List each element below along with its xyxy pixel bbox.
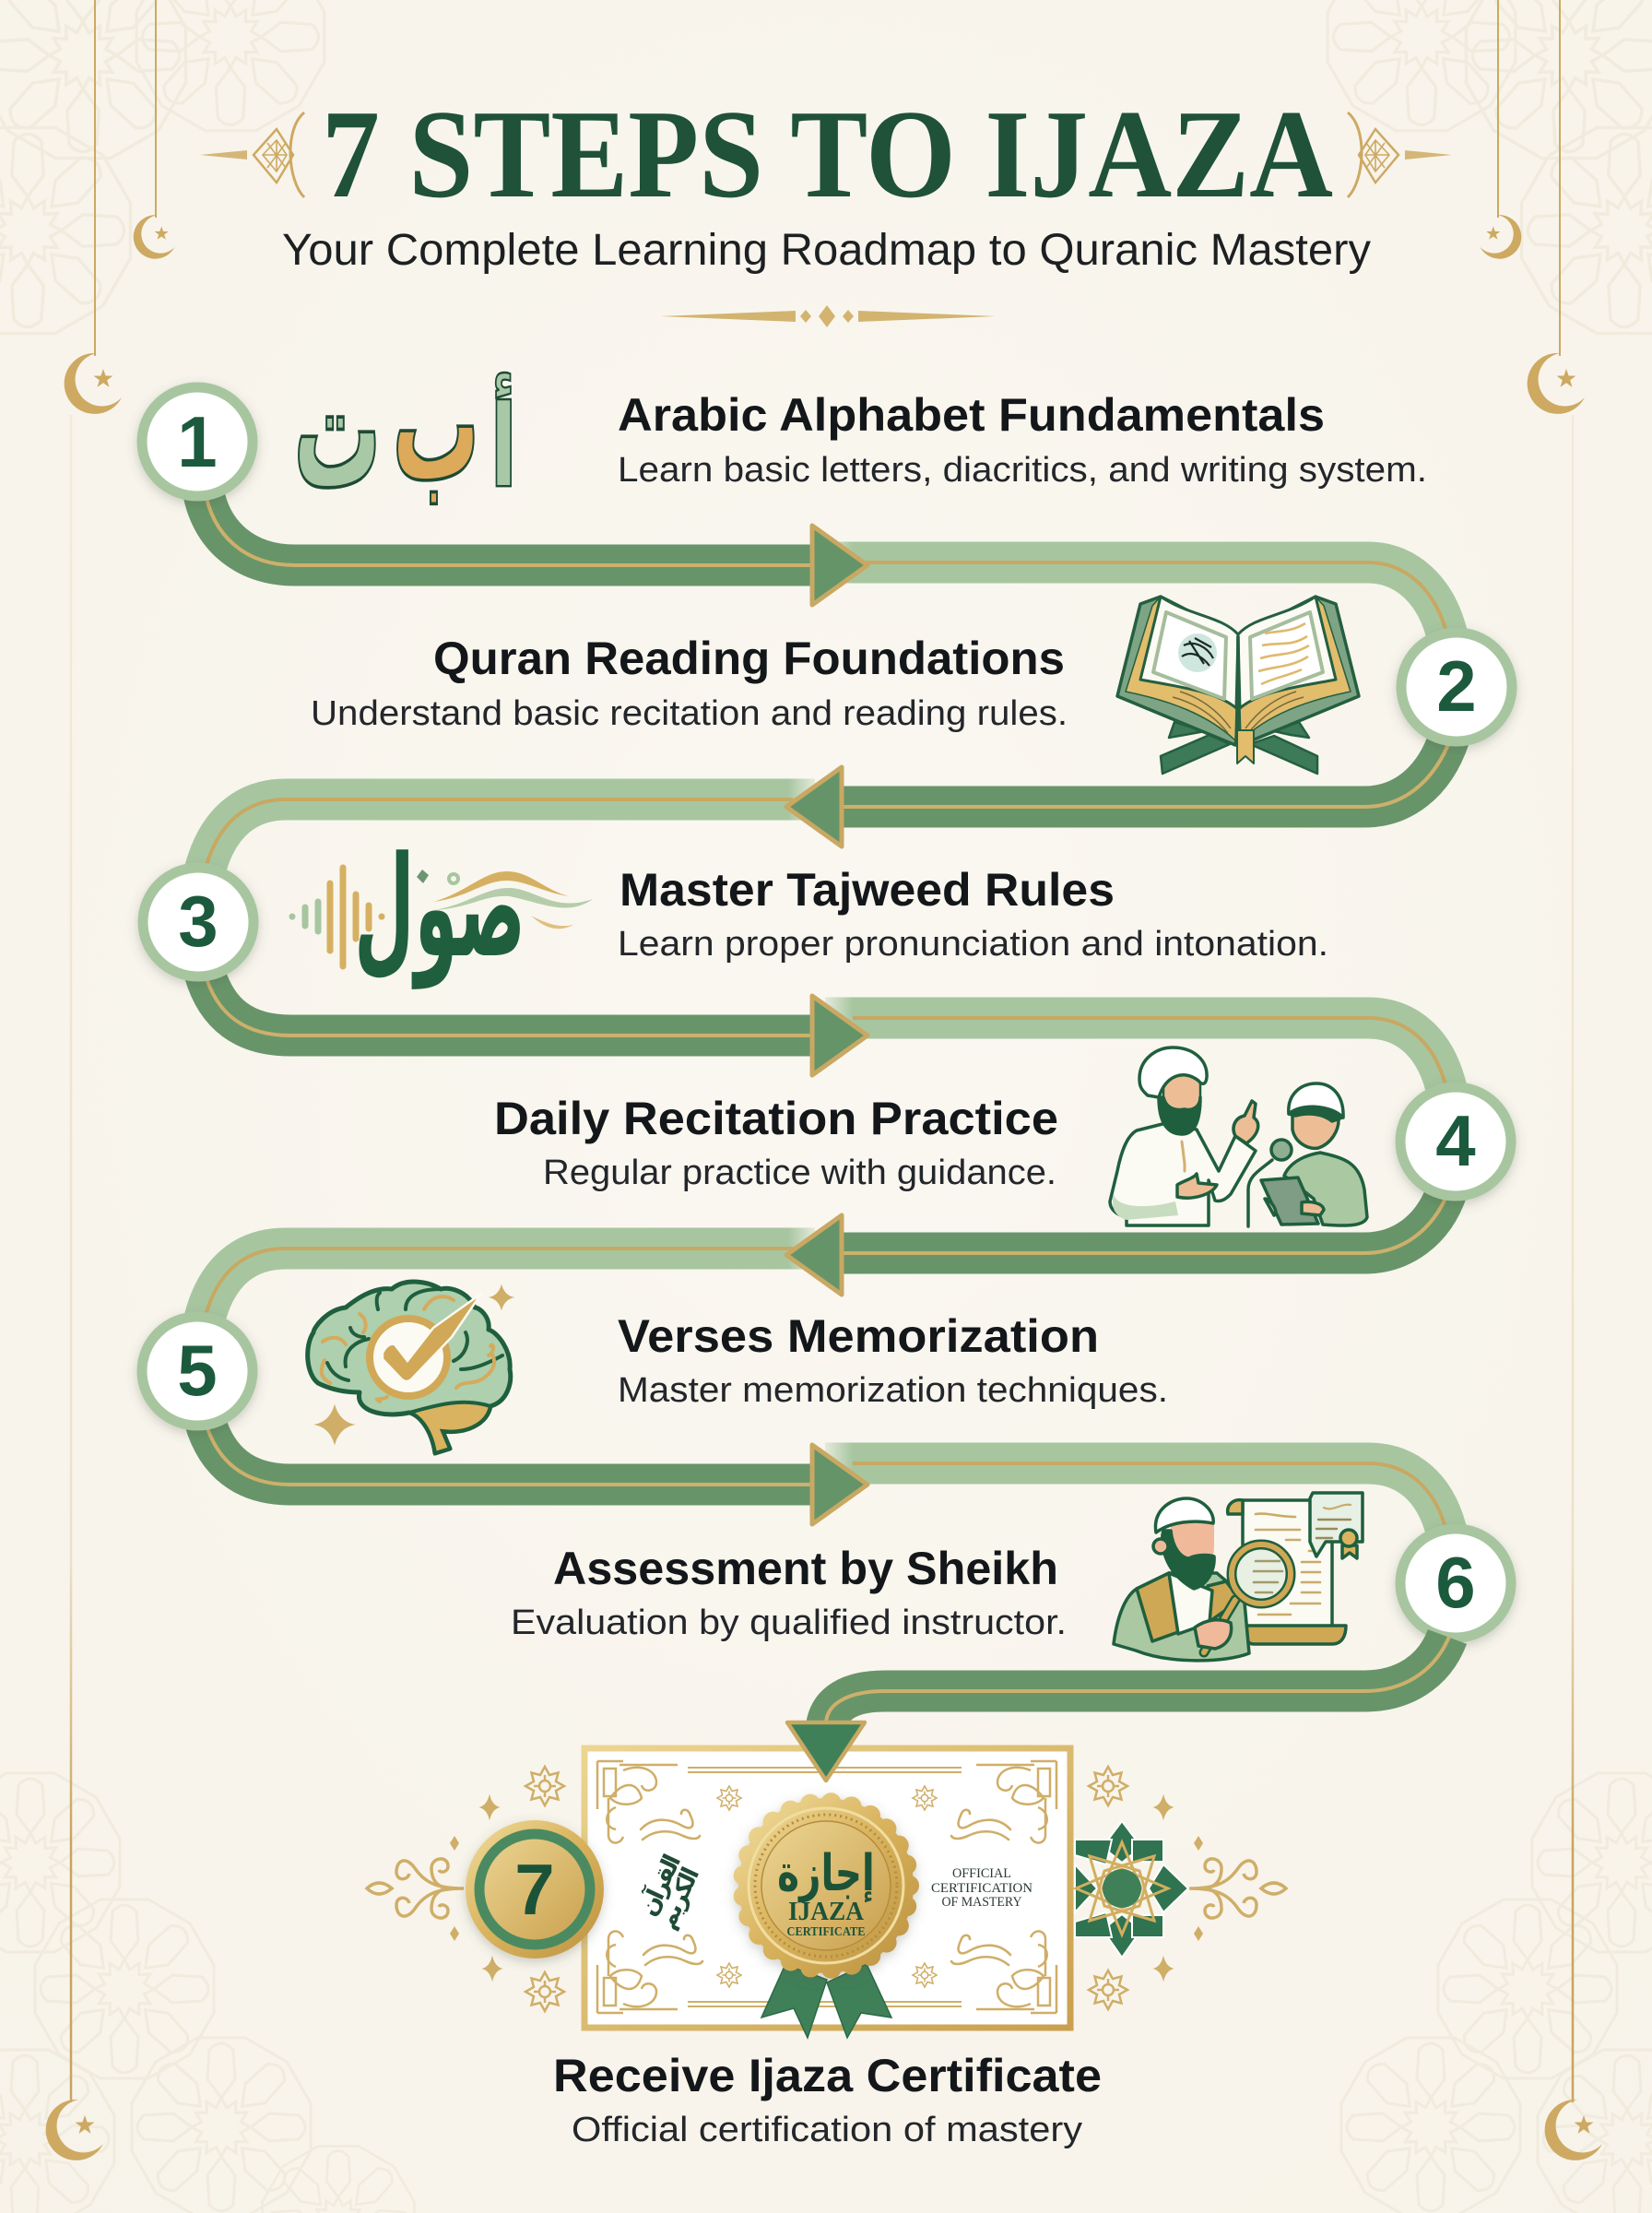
title: 7 STEPS TO IJAZA bbox=[322, 84, 1333, 224]
seal text bbox=[777, 1844, 875, 1938]
icon: Arabic letters: ت bbox=[293, 331, 382, 527]
description 7: Official certification of mastery bbox=[572, 2111, 1082, 2149]
icon: sound wave and calligraphy: صول bbox=[354, 827, 525, 989]
step 7 bbox=[367, 1637, 1449, 2149]
road segment: 3 to 4 bbox=[205, 973, 1447, 1093]
step 6 bbox=[511, 1493, 1511, 1661]
scroll document bbox=[1228, 1500, 1346, 1644]
heading 5: Verses Memorization bbox=[618, 1310, 1099, 1362]
road segment: 2 to 3 bbox=[205, 738, 1451, 871]
icon: open Quran on stand bbox=[1117, 597, 1359, 774]
teacher bbox=[1110, 1047, 1258, 1225]
gold seal bbox=[738, 1798, 914, 1973]
official certification text bbox=[931, 1866, 1032, 1910]
step 3 bbox=[143, 827, 1328, 989]
step 4 bbox=[494, 1047, 1511, 1226]
badge 7: 7 bbox=[514, 1849, 555, 1930]
badge 1: 1 bbox=[177, 401, 218, 482]
heading 7: Receive Ijaza Certificate bbox=[553, 2050, 1102, 2101]
badge 3: 3 bbox=[178, 881, 218, 962]
magnifying glass bbox=[1195, 1544, 1291, 1652]
heading 1: Arabic Alphabet Fundamentals bbox=[618, 389, 1325, 441]
description 6: Evaluation by qualified instructor. bbox=[511, 1604, 1067, 1642]
Quran calligraphy roundel: الكريم bbox=[653, 1864, 705, 1934]
badge 1 bbox=[142, 387, 253, 496]
seal text: IJAZA bbox=[788, 1897, 864, 1926]
official certification text: OFFICIAL bbox=[952, 1866, 1011, 1881]
certificate bbox=[584, 1748, 1070, 2038]
description 3: Learn proper pronunciation and intonation. bbox=[618, 925, 1328, 964]
icon: sound wave and calligraphy bbox=[292, 827, 593, 989]
road segment: 1 to 2 bbox=[203, 489, 1447, 636]
badge 4 bbox=[1400, 1087, 1511, 1196]
description 5: Master memorization techniques. bbox=[618, 1371, 1168, 1410]
badge 2: 2 bbox=[1436, 645, 1477, 727]
icon: Arabic letters: ب bbox=[392, 328, 480, 518]
icon: sheikh inspecting certificate bbox=[1114, 1493, 1363, 1661]
badge 7 bbox=[466, 1820, 604, 1959]
seal text: CERTIFICATE bbox=[787, 1924, 865, 1938]
left scroll ornament bbox=[367, 1767, 564, 2011]
badge 4: 4 bbox=[1435, 1100, 1476, 1181]
heading 4: Daily Recitation Practice bbox=[494, 1093, 1058, 1144]
subtitle: Your Complete Learning Roadmap to Quranic Mastery bbox=[282, 226, 1371, 275]
description 1: Learn basic letters, diacritics, and writing system. bbox=[618, 451, 1427, 490]
Quran calligraphy roundel bbox=[633, 1850, 705, 1934]
badge 6 bbox=[1400, 1529, 1511, 1638]
heading 2: Quran Reading Foundations bbox=[433, 633, 1065, 684]
microphone bbox=[1248, 1140, 1292, 1226]
seal text: إجازة bbox=[777, 1844, 875, 1903]
title ornament left bbox=[200, 112, 304, 197]
student bbox=[1261, 1083, 1367, 1225]
icon: teacher and student bbox=[1110, 1047, 1367, 1226]
heading 3: Master Tajweed Rules bbox=[620, 864, 1115, 916]
badge 5 bbox=[142, 1317, 253, 1426]
step 1 bbox=[142, 328, 1427, 527]
heading 6: Assessment by Sheikh bbox=[553, 1543, 1058, 1594]
official certification text: CERTIFICATION bbox=[931, 1881, 1032, 1896]
icon: Arabic letters bbox=[293, 328, 518, 527]
divider ornament bbox=[660, 305, 996, 327]
badge 2 bbox=[1401, 633, 1512, 741]
description 4: Regular practice with guidance. bbox=[543, 1154, 1056, 1192]
sheikh bbox=[1114, 1498, 1249, 1661]
right rosette ornament bbox=[1075, 1767, 1286, 2009]
badge 5: 5 bbox=[177, 1330, 218, 1411]
official certification text: OF MASTERY bbox=[942, 1895, 1022, 1910]
ribbon bbox=[761, 1964, 891, 2038]
certificate badge bbox=[1310, 1493, 1363, 1558]
roadmap path bbox=[203, 489, 1451, 1535]
Quran calligraphy roundel: القرآن bbox=[633, 1850, 687, 1921]
badge 6: 6 bbox=[1435, 1542, 1476, 1623]
badge 3 bbox=[143, 868, 254, 976]
road segment: 5 to 6 bbox=[205, 1420, 1447, 1535]
step 5 bbox=[142, 1282, 1168, 1453]
step 2 bbox=[311, 597, 1512, 774]
icon: brain with checkmark bbox=[308, 1282, 514, 1453]
icon: Arabic letters: أ bbox=[490, 373, 518, 514]
description 2: Understand basic recitation and reading rules. bbox=[311, 694, 1068, 733]
title ornament right bbox=[1348, 112, 1452, 197]
road segment: 4 to 5 bbox=[205, 1189, 1449, 1319]
road segment: 6 to 7 bbox=[787, 1637, 1449, 1781]
